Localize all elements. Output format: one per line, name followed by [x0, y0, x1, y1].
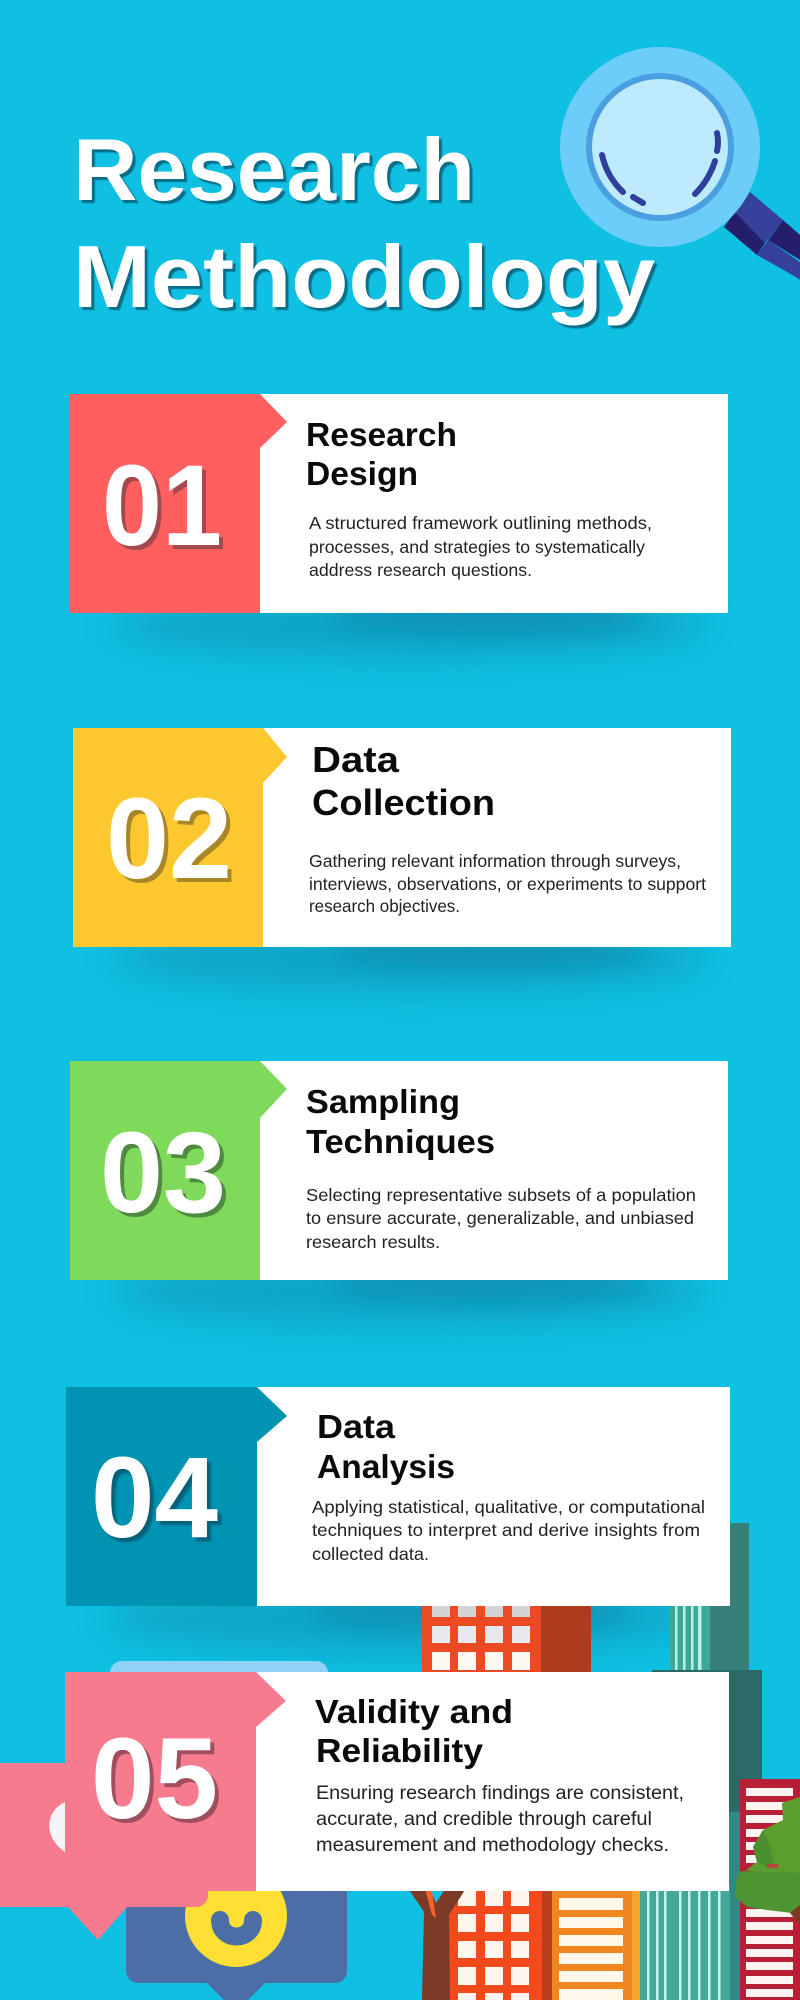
white card	[73, 728, 731, 947]
body text	[312, 1497, 705, 1564]
white card	[66, 1387, 730, 1606]
panel: 03 Sampling Techniques	[70, 1061, 728, 1326]
dark blue bubble	[126, 1700, 347, 2000]
body text	[309, 851, 706, 916]
number: 03	[100, 1109, 226, 1237]
heading: Research	[306, 416, 457, 453]
body text: measurement and methodology checks.	[316, 1835, 669, 1856]
panel: 04 Data Analysis	[66, 1387, 730, 1606]
illustration: speech bubbles	[0, 1661, 347, 2000]
card 4 shadow	[100, 1584, 700, 1652]
body text	[316, 1783, 684, 1856]
heading	[306, 1083, 495, 1160]
number tab	[66, 1387, 287, 1606]
heading	[312, 739, 495, 823]
building: right red striped	[740, 1779, 800, 2000]
number: 04	[91, 1434, 218, 1562]
number tab	[70, 394, 287, 613]
heading: Data	[312, 739, 400, 780]
card shadow	[110, 925, 710, 993]
heading: Collection	[312, 782, 495, 823]
light blue bubble	[110, 1661, 328, 1731]
heading: Reliability	[316, 1732, 484, 1769]
tree: brown trunk	[406, 1885, 468, 2000]
title: Research	[73, 120, 475, 219]
heading: Sampling	[306, 1083, 460, 1120]
white card	[70, 1061, 728, 1280]
heading	[306, 416, 457, 492]
heading: Techniques	[306, 1123, 495, 1160]
title	[73, 120, 655, 326]
tree: green foliage	[735, 1797, 800, 1925]
heading	[317, 1408, 455, 1485]
white crescent	[49, 1802, 65, 1852]
body text: Selecting representative subsets of a population	[306, 1185, 696, 1205]
panel: 02 Data Collection	[73, 728, 731, 993]
heading: Analysis	[317, 1448, 455, 1485]
panel: 01 Research Design	[70, 394, 728, 659]
body text: Ensuring research findings are consistent,	[316, 1783, 684, 1804]
body text: Applying statistical, qualitative, or computational	[312, 1497, 705, 1517]
card shadow	[110, 1258, 710, 1326]
number tab	[65, 1672, 286, 1891]
body text: accurate, and credible through careful	[316, 1809, 652, 1830]
title: Methodology	[73, 227, 655, 326]
body text: Gathering relevant information through surveys,	[309, 851, 681, 871]
body text: techniques to interpret and derive insights from	[312, 1520, 700, 1540]
heading: Design	[306, 455, 418, 492]
building: upper teal tower	[652, 1523, 762, 2000]
body text	[309, 513, 652, 580]
body text: interviews, observations, or experiments to support	[309, 874, 706, 894]
number: 02	[106, 775, 232, 903]
yellow smile face	[185, 1865, 287, 1967]
body text: processes, and strategies to systematically	[309, 537, 645, 557]
body text: research results.	[306, 1232, 440, 1252]
number tab	[73, 728, 287, 947]
body text: research objectives.	[309, 896, 460, 916]
number: 05	[91, 1715, 218, 1843]
building: lower teal striped	[640, 1885, 730, 2000]
pink bubble	[0, 1763, 208, 1940]
icon: magnifying glass	[560, 47, 800, 280]
body text: address research questions.	[309, 560, 532, 580]
body text: to ensure accurate, generalizable, and unbiased	[306, 1208, 694, 1228]
building: lower orange	[552, 1885, 640, 2000]
white card	[70, 394, 728, 613]
heading: Data	[317, 1408, 396, 1445]
card shadow	[110, 591, 710, 659]
number: 01	[102, 442, 222, 570]
building: lower red	[448, 1885, 552, 2000]
body text	[306, 1185, 696, 1252]
body text: collected data.	[312, 1544, 429, 1564]
white card	[65, 1672, 729, 1891]
number tab	[70, 1061, 287, 1280]
panel: 05 Validity and Reliability	[65, 1672, 729, 1891]
heading: Validity and	[315, 1693, 513, 1730]
illustration: city buildings	[406, 1523, 800, 2000]
heading	[315, 1693, 513, 1769]
building: upper red tower	[422, 1590, 591, 1674]
body text: A structured framework outlining methods,	[309, 513, 652, 533]
